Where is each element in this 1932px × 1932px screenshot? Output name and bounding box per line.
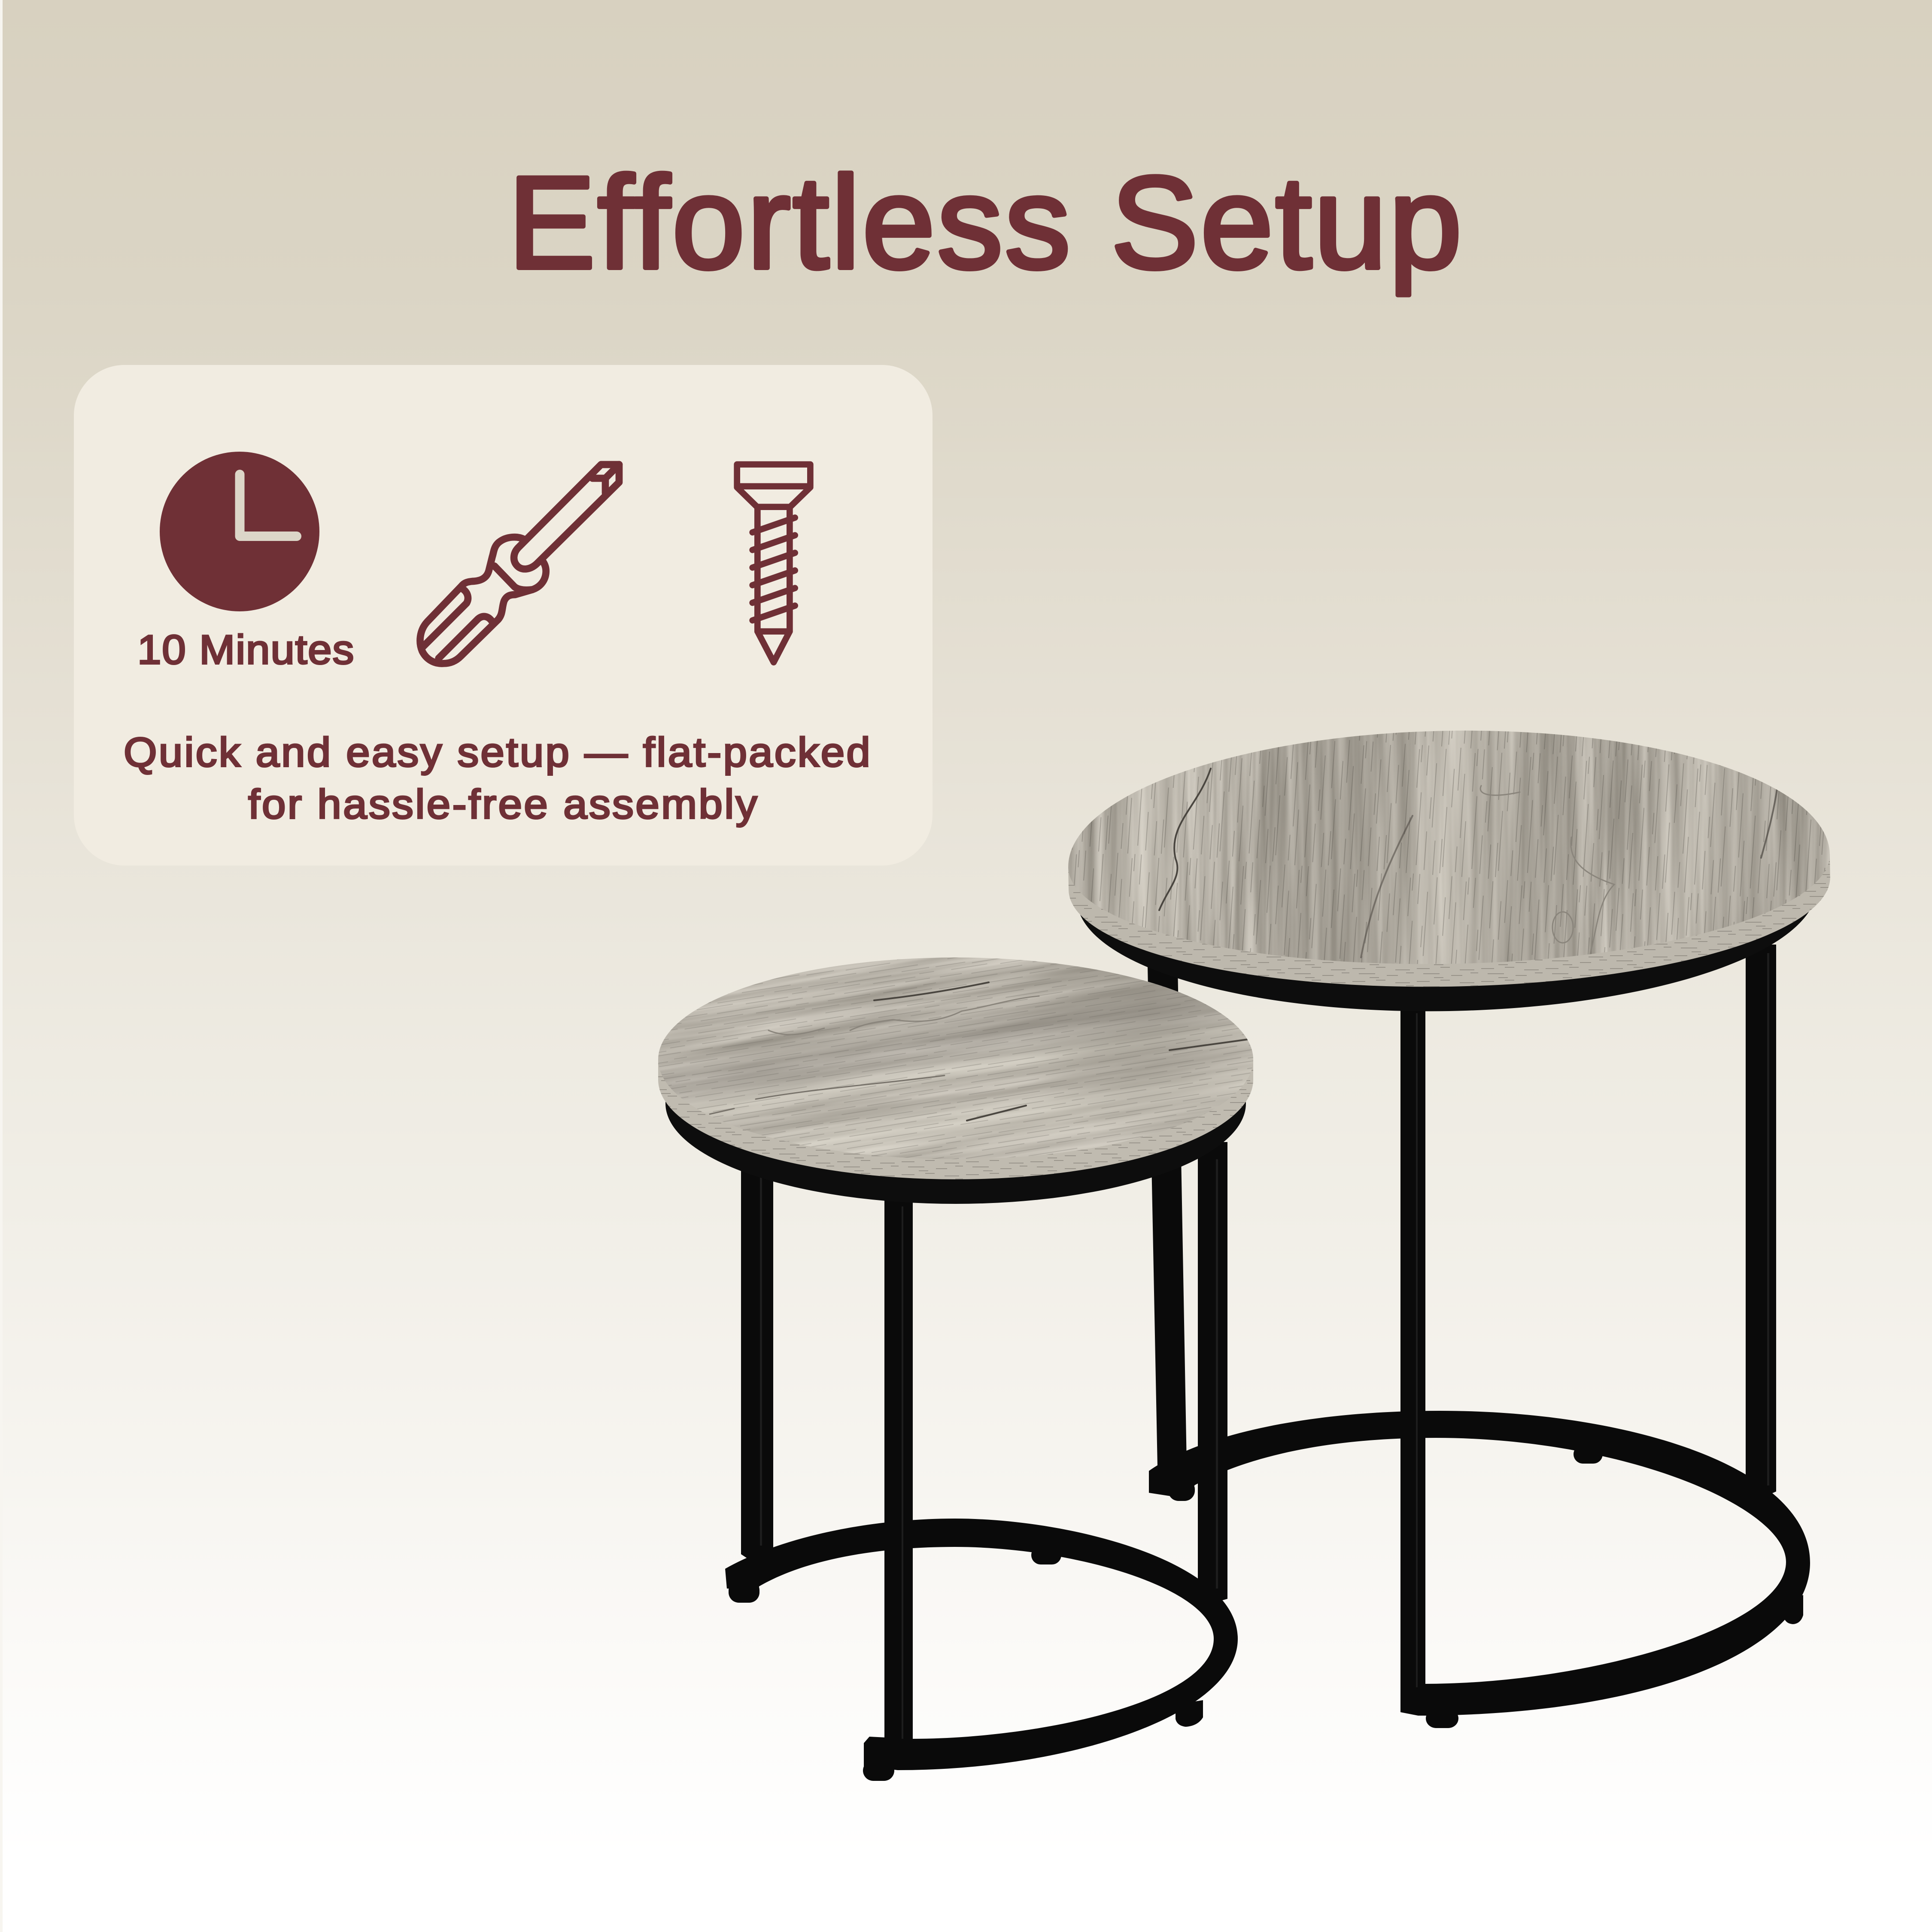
large table base and legs [1148, 945, 1810, 1728]
small table top edge [658, 1060, 1253, 1179]
small table top surface [658, 957, 1253, 1159]
left edge strip [0, 0, 3, 1932]
title: Effortless Setup [508, 149, 1462, 297]
large table top surface [1065, 728, 1833, 968]
icon: screw [737, 465, 810, 662]
large nesting table [1065, 728, 1833, 1728]
icon: screwdriver [420, 465, 619, 663]
description text [124, 729, 870, 827]
small table base and legs [725, 1142, 1238, 1781]
small nesting table [658, 957, 1253, 1781]
description text: Quick and easy setup — flat-packed [124, 729, 870, 775]
label: 10 Minutes: 10 Minutes [137, 626, 354, 673]
panel: setup info card [74, 365, 933, 866]
large table ring [1075, 769, 1819, 1018]
icon: clock [160, 452, 319, 611]
large table top edge [1068, 854, 1830, 987]
description text: for hassle-free assembly [248, 781, 757, 827]
small table ring [665, 1003, 1246, 1204]
